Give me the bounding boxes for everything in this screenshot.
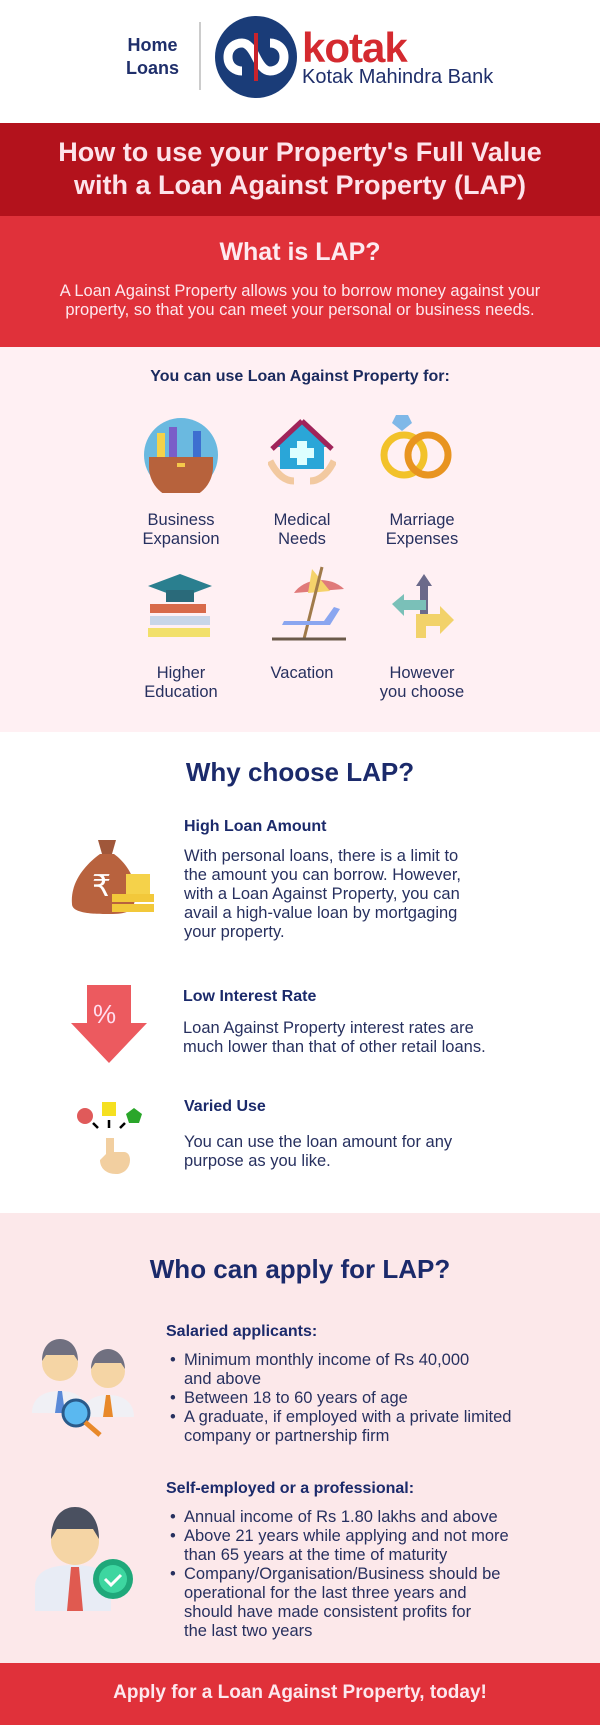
item: self-employed: than 65 years at the time of maturity [184,1546,447,1564]
panel: uses [0,347,600,732]
item: self-employed: should have made consistent profits for [184,1603,471,1621]
label [380,664,464,701]
item: self-employed: operational for the last three years and [184,1584,467,1602]
item: low interest: Loan Against Property interest rates are [183,1019,474,1037]
icon: directions [392,574,454,638]
item: self-employed: Annual income of Rs 1.80 lakhs and above [184,1508,498,1526]
title band [0,123,600,216]
item: high loan amount: High Loan Amount [184,818,326,835]
item: varied use: You can use the loan amount for any [184,1133,452,1151]
item: high loan amount: avail a high-value loan by mortgaging [184,904,457,922]
icon: medical [268,419,336,484]
label: Vacation [270,664,334,682]
item: self-employed: Self-employed or a professional: [166,1480,414,1497]
icon: money bag: ₹ [92,870,111,903]
label [274,511,330,548]
item: low interest: Low Interest Rate [183,988,316,1005]
panel: who can apply [0,1213,600,1663]
item: salaried: company or partnership firm [184,1427,389,1445]
item: high loan amount: With personal loans, there is a limit to [184,847,458,865]
label: Expenses [386,530,458,548]
label: Marriage [389,511,455,529]
label: Business [148,511,214,529]
icon: down arrow: % [93,999,116,1029]
item: low interest [183,988,486,1056]
item: self-employed: Company/Organisation/Business should be [184,1565,500,1583]
text: property, so that you can meet your personal or business needs. [65,301,535,319]
text: home loans: Loans [126,58,179,78]
heading: What is LAP? [219,238,381,266]
text: kotak: kotak [302,24,407,71]
item: salaried: Salaried applicants: [166,1323,317,1340]
heading: Why choose LAP? [186,757,414,787]
label [142,511,220,548]
item: salaried: Minimum monthly income of Rs 40,000 [184,1351,469,1369]
footer text: Apply for a Loan Against Property, today! [113,1682,487,1703]
panel: what is LAP [0,216,600,347]
label [386,511,458,548]
panel: why choose [0,732,600,1213]
item: self-employed: Above 21 years while applying and not more [184,1527,509,1545]
footer [0,1663,600,1725]
header [0,0,600,123]
item: varied use [184,1098,452,1170]
label: Expansion [142,530,220,548]
icon: education [148,574,212,637]
label: Higher [157,664,205,682]
label: Education [144,683,218,701]
item: self-employed: the last two years [184,1622,312,1640]
item: varied use: purpose as you like. [184,1152,331,1170]
label: However [389,664,455,682]
item: salaried: A graduate, if employed with a private limited [184,1408,511,1426]
icon: professional [35,1507,133,1611]
icon: rings [380,415,452,478]
icon: vacation [272,566,346,640]
item: high loan amount [184,818,461,941]
item: self-employed [166,1480,509,1640]
title: How to use your Property's Full Value [58,137,542,167]
heading: Who can apply for LAP? [150,1254,450,1284]
label: you choose [380,683,464,701]
logo [215,16,297,98]
item: salaried [166,1323,511,1445]
text: home loans: Home [128,35,178,55]
title: with a Loan Against Property (LAP) [74,170,526,200]
item: salaried: and above [184,1370,261,1388]
item: salaried: Between 18 to 60 years of age [184,1389,408,1407]
icon: business [144,418,218,493]
item: varied use: Varied Use [184,1098,266,1115]
item: high loan amount: your property. [184,923,285,941]
label: Needs [278,530,326,548]
item: high loan amount: with a Loan Against Property, you can [184,885,460,903]
label [144,664,218,701]
text: home loans [126,35,179,78]
item: low interest: much lower than that of other retail loans. [183,1038,486,1056]
icon: choice hand [77,1102,142,1174]
heading: You can use Loan Against Property for: [150,368,450,385]
text: A Loan Against Property allows you to borrow money against your [60,282,540,300]
item: high loan amount: the amount you can borrow. However, [184,866,461,884]
label: Medical [274,511,330,529]
icon: down arrow [71,985,147,1063]
icon: money bag [72,840,154,914]
header: Kotak Mahindra Bank [302,66,493,88]
text [60,282,540,319]
icon: salaried people [32,1339,134,1437]
title [58,137,542,200]
